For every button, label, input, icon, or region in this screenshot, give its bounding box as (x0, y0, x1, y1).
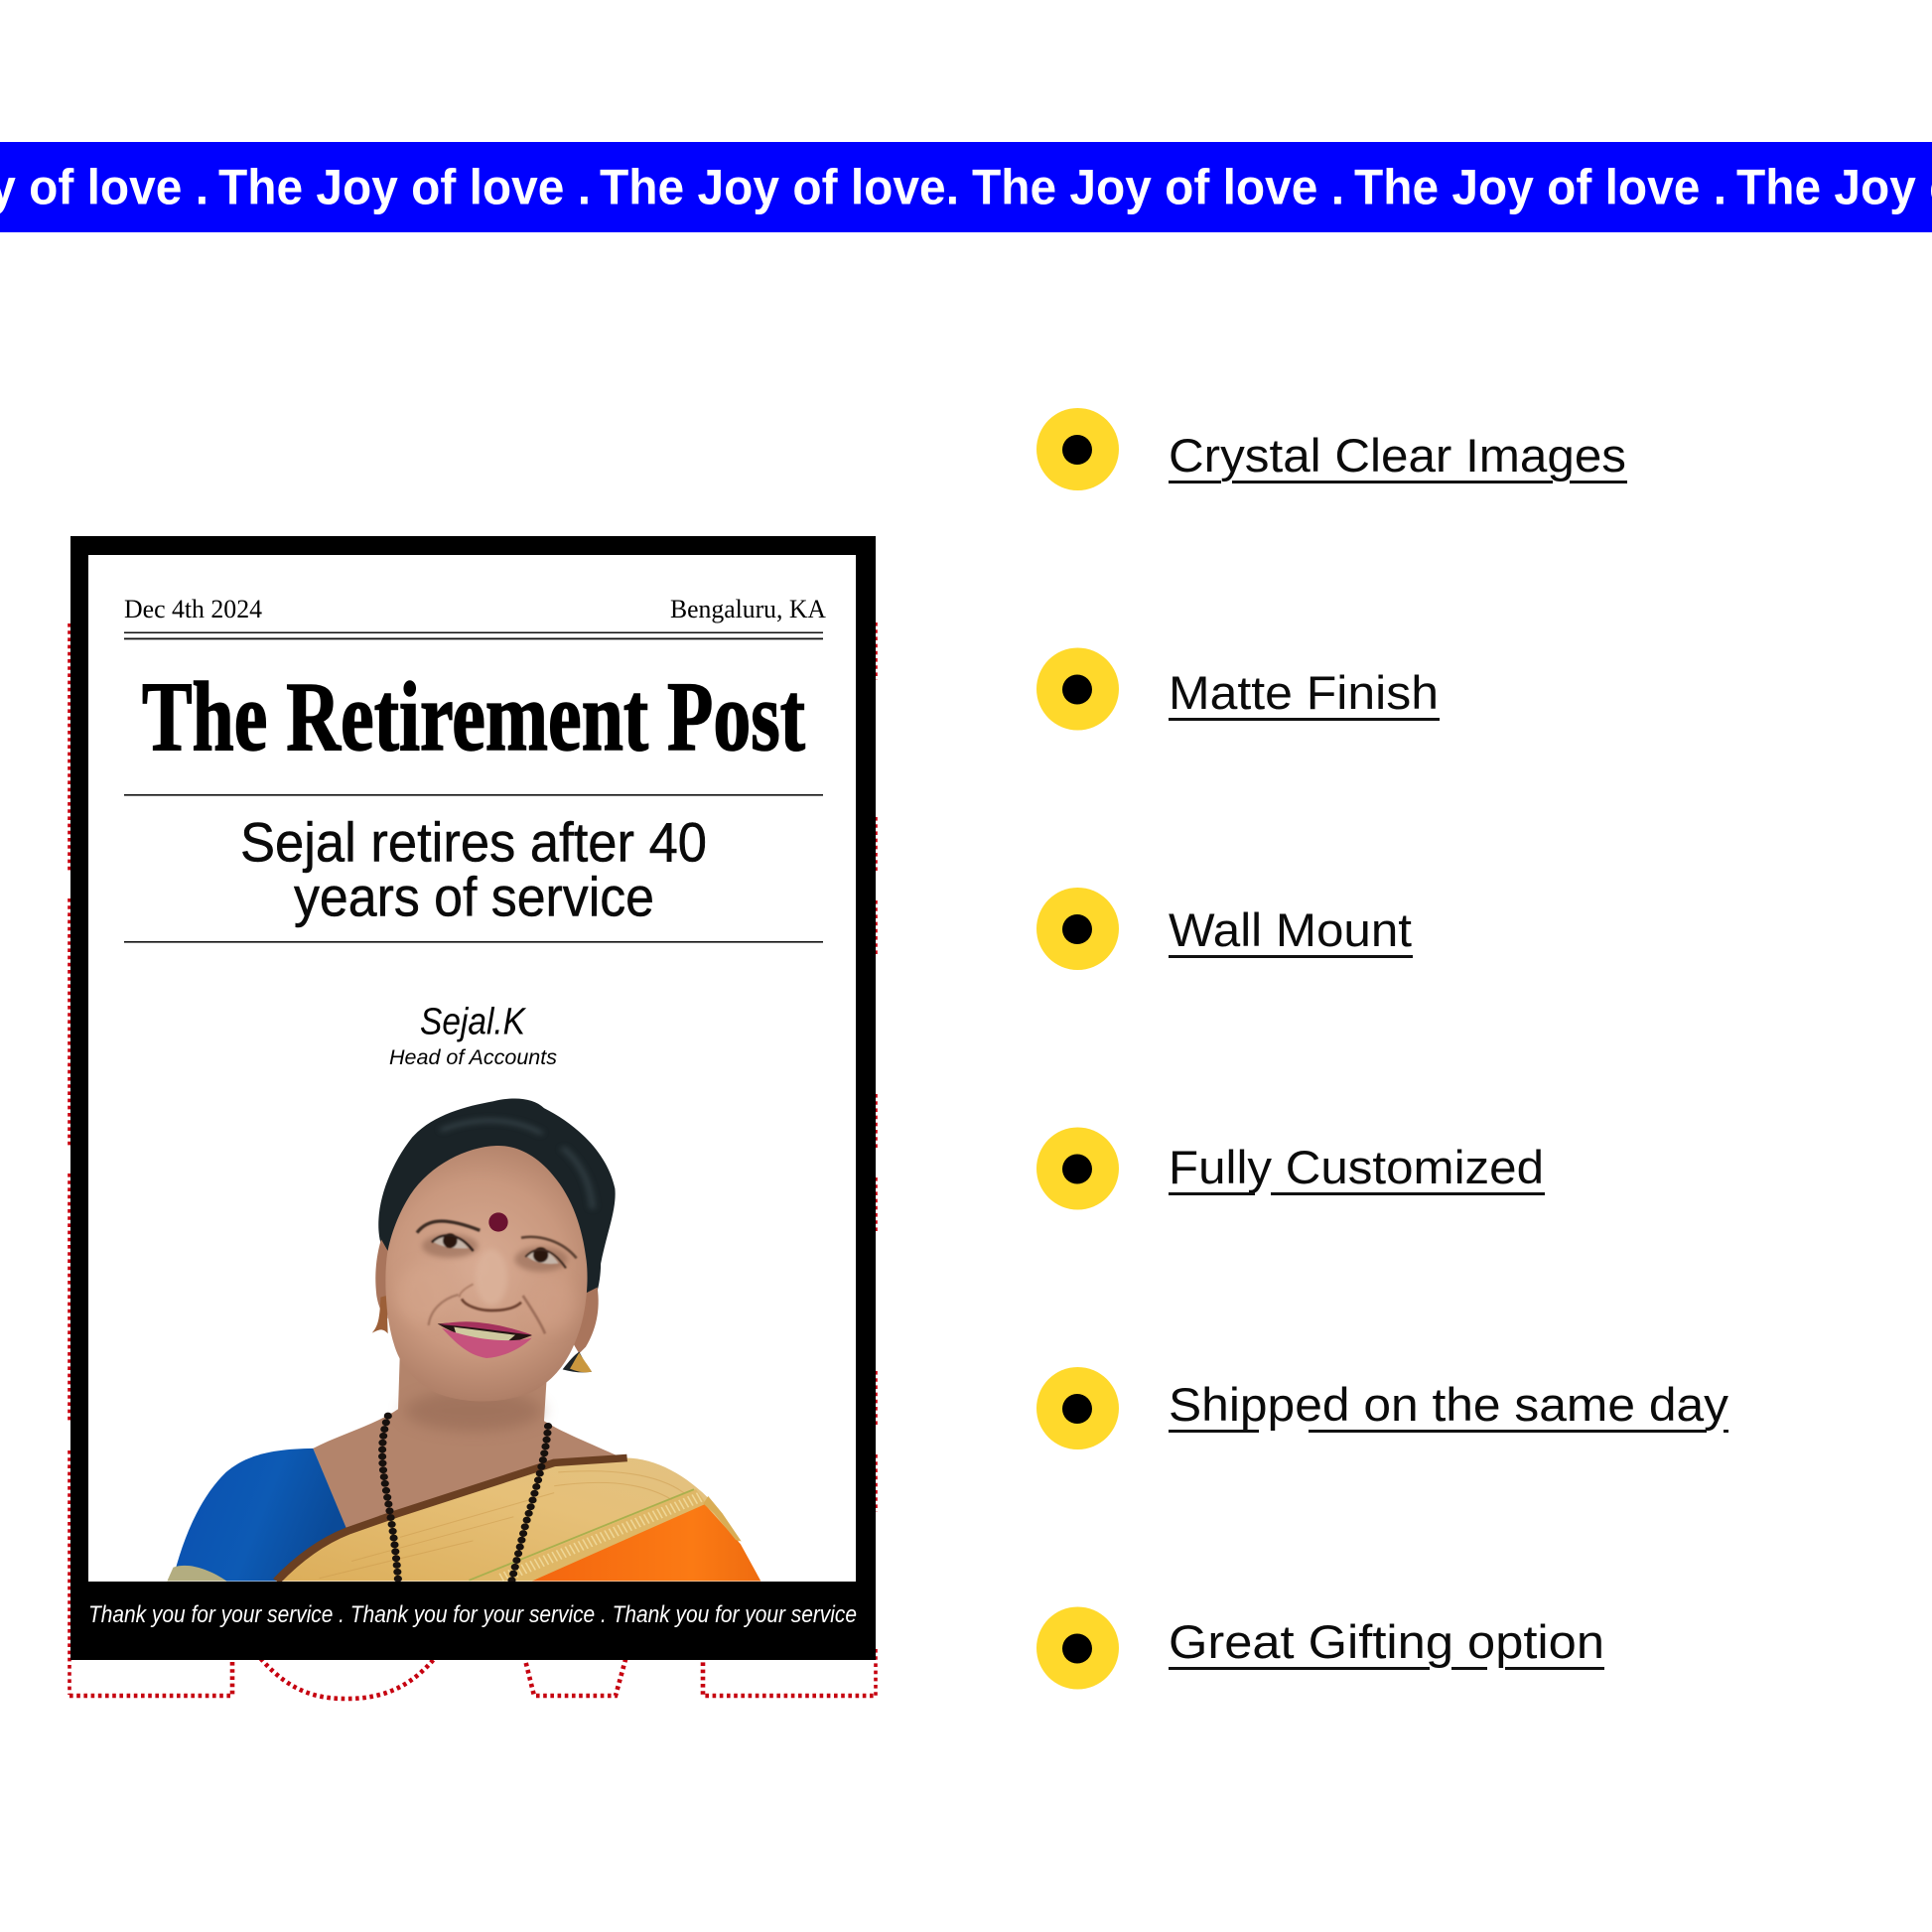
feature: Wall Mount (1036, 888, 1413, 970)
left ear (375, 1239, 388, 1318)
feature: Crystal Clear Images: Crystal Clear Images (1169, 429, 1626, 482)
sari brown edge (277, 1457, 627, 1581)
blouse (173, 1449, 347, 1581)
face shape (385, 1146, 588, 1402)
feature: Matte Finish (1036, 647, 1440, 731)
mouth (438, 1323, 532, 1343)
right earring (563, 1352, 592, 1372)
feature: Wall Mount: Wall Mount (1169, 903, 1412, 956)
soft facial features (417, 1221, 577, 1333)
banner: The Joy of love ticker: The Joy of love . (218, 159, 591, 214)
right eye (526, 1250, 559, 1264)
headline: Sejal retires after 40 (240, 810, 707, 874)
cheek shading (397, 1264, 450, 1323)
teeth (454, 1327, 515, 1342)
rule (124, 794, 823, 796)
banner: The Joy of love ticker: The Joy of love . (1354, 159, 1726, 214)
name: Sejal.K (420, 1001, 526, 1042)
banner: The Joy of love ticker: The Joy of love . (972, 159, 1344, 214)
banner: The Joy of love ticker (0, 142, 1932, 232)
double rule (124, 631, 823, 639)
poster frame (70, 536, 876, 1660)
nose shadow (462, 1299, 521, 1311)
bindi (488, 1212, 508, 1232)
portrait: smiling woman in blue blouse and orange sari (167, 1098, 760, 1581)
footer band (70, 1582, 876, 1660)
headline: years of service (294, 866, 654, 927)
left earring (372, 1296, 388, 1333)
die-cut dotted outline behind the poster (69, 622, 876, 1699)
newspaper masthead: The Retirement Post (142, 661, 805, 771)
body (167, 1098, 760, 1581)
newspaper date: Dec 4th 2024 (124, 594, 262, 623)
brows (417, 1221, 480, 1233)
feature: Matte Finish: Matte Finish (1169, 666, 1439, 719)
feature: Fully Customized (1036, 1128, 1545, 1209)
footer message: Thank you for your service . Thank you for your service . Thank you for your service (88, 1601, 857, 1628)
sari zari border (474, 1489, 706, 1581)
feature: Great Gifting option: Great Gifting option (1169, 1615, 1604, 1668)
feature: Shipped on the same day: Shipped on the same day (1169, 1378, 1729, 1431)
sari gold (277, 1457, 741, 1581)
face (372, 1146, 599, 1402)
neck and chest (313, 1346, 627, 1532)
role: Head of Accounts (389, 1045, 557, 1069)
newspaper location: Bengaluru, KA (670, 594, 826, 623)
sari orange (532, 1504, 760, 1581)
sari weave (319, 1471, 684, 1579)
smile folds (429, 1295, 459, 1325)
feature: Crystal Clear Images (1036, 408, 1627, 490)
hair streaks (441, 1121, 593, 1209)
rule (124, 941, 823, 943)
left eye (433, 1236, 469, 1248)
feature: Shipped on the same day (1036, 1367, 1729, 1449)
eye sockets (422, 1234, 479, 1258)
feature: Fully Customized: Fully Customized (1169, 1141, 1544, 1193)
necklace (382, 1416, 548, 1581)
sleeve trim (167, 1566, 226, 1581)
nose highlight (476, 1249, 507, 1306)
feature: Great Gifting option (1036, 1606, 1604, 1690)
headline (240, 810, 707, 927)
banner: The Joy of love ticker: The Joy of love. (600, 159, 959, 214)
hair (378, 1098, 616, 1325)
upper lip (439, 1321, 532, 1335)
lower lip (442, 1328, 532, 1358)
right ear (569, 1288, 599, 1353)
